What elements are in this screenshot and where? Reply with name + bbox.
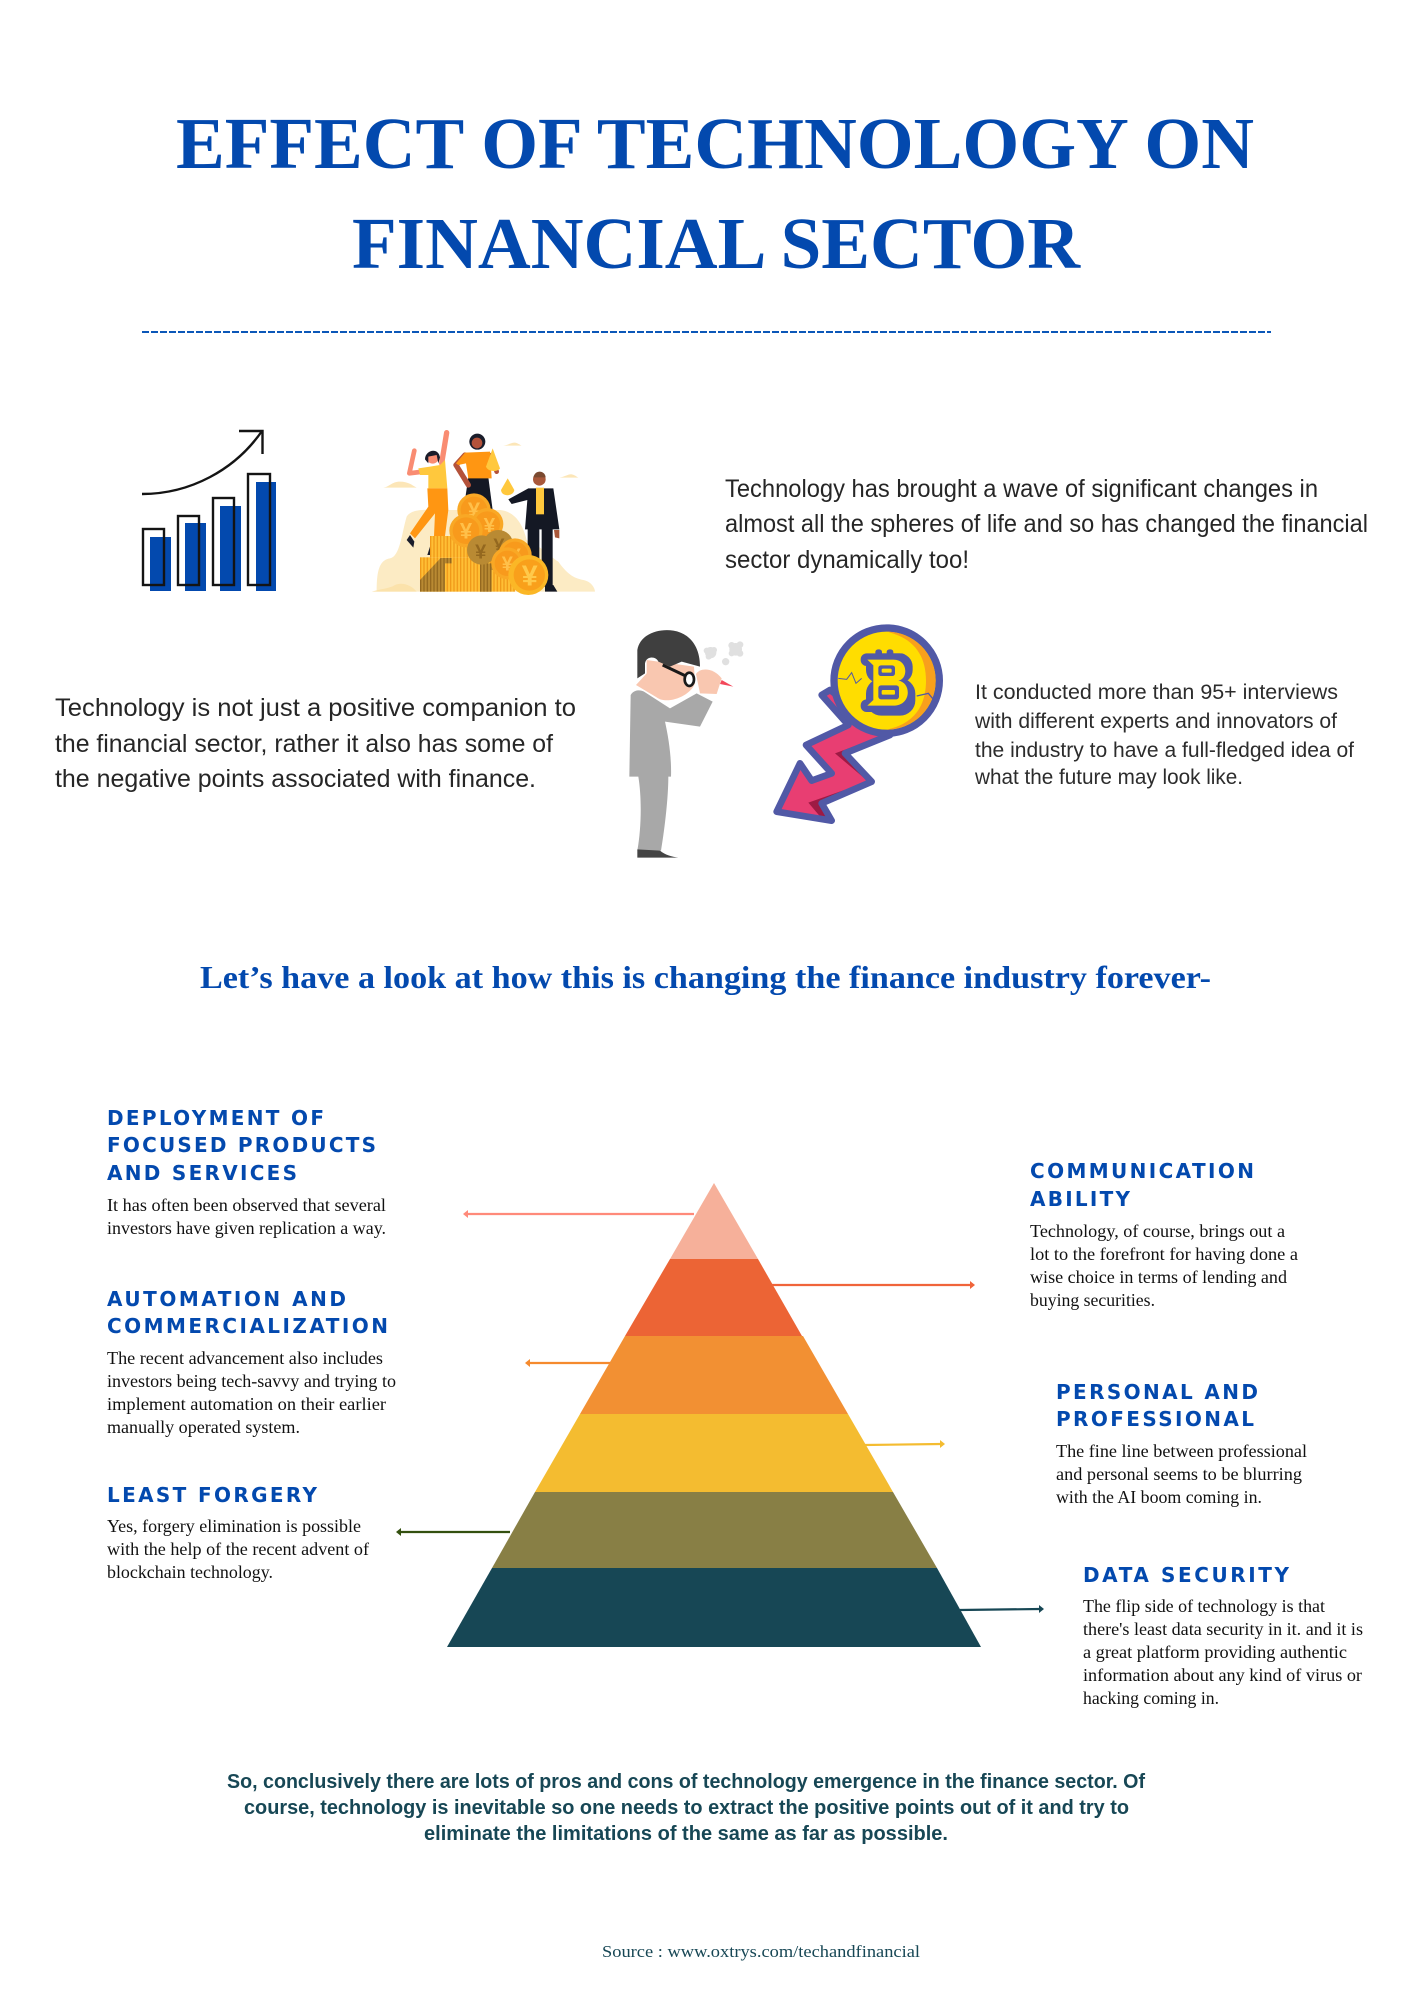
text block: interviews: It conducted more than 95+ interviews [975,680,1338,704]
person: man in suit [501,472,559,592]
text block: intro left: the negative points associated with finance. [55,765,536,793]
panel: deployment of focused products [107,1106,386,1238]
panel: data security: The flip side of technology is that [1083,1596,1325,1616]
panel: automation and commercialization: AUTOMATION AND [107,1287,346,1311]
panel: communication ability: COMMUNICATION [1030,1159,1254,1183]
panel: personal and professional: with the AI boom coming in. [1056,1487,1262,1507]
person: woman jumping [407,433,448,555]
arrow: third tier to automation [525,1359,610,1367]
icon: falling bitcoin arrow [777,628,939,821]
arrow: fifth tier to least forgery [396,1528,510,1536]
panel: personal and professional: and personal seems to be blurring [1056,1464,1302,1484]
person: woman with money bag [456,434,500,510]
panel: least forgery: with the help of the recent advent of [107,1539,369,1559]
text block: intro right [725,475,1368,574]
arrow: second tier to communication [772,1281,975,1289]
text block: interviews: what the future may look like. [974,765,1243,789]
text block: intro left: the financial sector, rather it also has some of [55,730,553,758]
conclusion text: So, conclusively there are lots of pros and cons of technology emergence in the finance sector. Of [227,1771,1145,1793]
conclusion text: eliminate the limitations of the same as far as possible. [424,1823,948,1845]
arrow: top tier to deployment [463,1210,694,1218]
icon: man looking through glasses [629,630,743,858]
panel: automation and commercialization: The recent advancement also includes [107,1348,383,1368]
yen coins: ¥ [475,542,487,564]
panel: personal and professional: PROFESSIONAL [1056,1407,1254,1431]
panel: least forgery: Yes, forgery elimination is possible [107,1516,361,1536]
panel: data security: hacking coming in. [1083,1688,1219,1708]
title: FINANCIAL SECTOR [352,203,1081,284]
panel: personal and professional [1056,1380,1307,1507]
text block: intro left: Technology is not just a positive companion to [55,694,576,722]
panel: deployment of focused products: investors have given replication a way. [107,1218,386,1238]
title [176,103,1254,284]
text block: intro left [55,694,576,793]
icon: people on coin pile [372,433,595,595]
panel: personal and professional: The fine line between professional [1056,1441,1307,1461]
panel: data security: there's least data security in it. and it is [1083,1619,1363,1639]
panel: data security: a great platform providing authentic [1083,1642,1347,1662]
text block: interviews [974,680,1354,789]
panel: communication ability [1030,1159,1298,1310]
panel: data security: DATA SECURITY [1083,1563,1290,1587]
arrow: fourth tier to personal [865,1440,945,1448]
panel: deployment of focused products: AND SERVICES [107,1161,297,1185]
panel: automation and commercialization [107,1287,396,1437]
panel: least forgery [107,1483,369,1582]
yen coins: ¥ [509,545,521,568]
yen coins [449,493,548,595]
panel: deployment of focused products: It has often been observed that several [107,1195,386,1215]
conclusion text: course, technology is inevitable so one needs to extract the positive points out of it and try to [244,1797,1129,1819]
panel: personal and professional: PERSONAL AND [1056,1380,1258,1404]
text block: intro right: Technology has brought a wave of significant changes in [725,475,1318,503]
text block: intro right: almost all the spheres of life and so has changed the financial [725,510,1368,538]
yen coins: ¥ [468,498,481,523]
panel: communication ability: Technology, of course, brings out a [1030,1221,1285,1241]
panel: automation and commercialization: manually operated system. [107,1417,300,1437]
panel: data security: information about any kind of virus or [1083,1665,1362,1685]
source line: Source : www.oxtrys.com/techandfinancial [602,1942,920,1961]
text block: interviews: the industry to have a full-fledged idea of [975,738,1354,762]
yen coins: ¥ [522,560,538,592]
icon: growth bar chart [142,431,276,591]
panel: least forgery: LEAST FORGERY [107,1483,318,1507]
panel: automation and commercialization: investors being tech-savvy and trying to [107,1371,396,1391]
yen coins: ¥ [493,536,505,558]
text block: interviews: with different experts and innovators of [974,709,1337,733]
panel: communication ability: ABILITY [1030,1187,1131,1211]
panel: deployment of focused products: FOCUSED PRODUCTS [107,1133,376,1157]
panel: data security [1083,1563,1363,1708]
yen coins: ¥ [484,514,496,537]
panel: automation and commercialization: implement automation on their earlier [107,1394,386,1414]
yen coins: ¥ [460,519,473,544]
panel: communication ability: buying securities. [1030,1290,1155,1310]
coin stacks [420,536,515,592]
subheading: Let’s have a look at how this is changing the finance industry forever- [200,959,1211,995]
arrow: base tier to data security [960,1605,1044,1613]
text block: intro right: sector dynamically too! [725,546,969,574]
panel: communication ability: wise choice in terms of lending and [1030,1267,1287,1287]
title: EFFECT OF TECHNOLOGY ON [176,103,1254,184]
pyramid chart [447,1183,981,1647]
yen coins: ¥ [502,554,514,576]
conclusion text [227,1771,1145,1845]
panel: least forgery: blockchain technology. [107,1562,273,1582]
panel: deployment of focused products: DEPLOYMENT OF [107,1106,324,1130]
panel: communication ability: lot to the forefront for having done a [1030,1244,1298,1264]
panel: automation and commercialization: COMMERCIALIZATION [107,1314,388,1338]
bitcoin symbol [861,649,915,716]
